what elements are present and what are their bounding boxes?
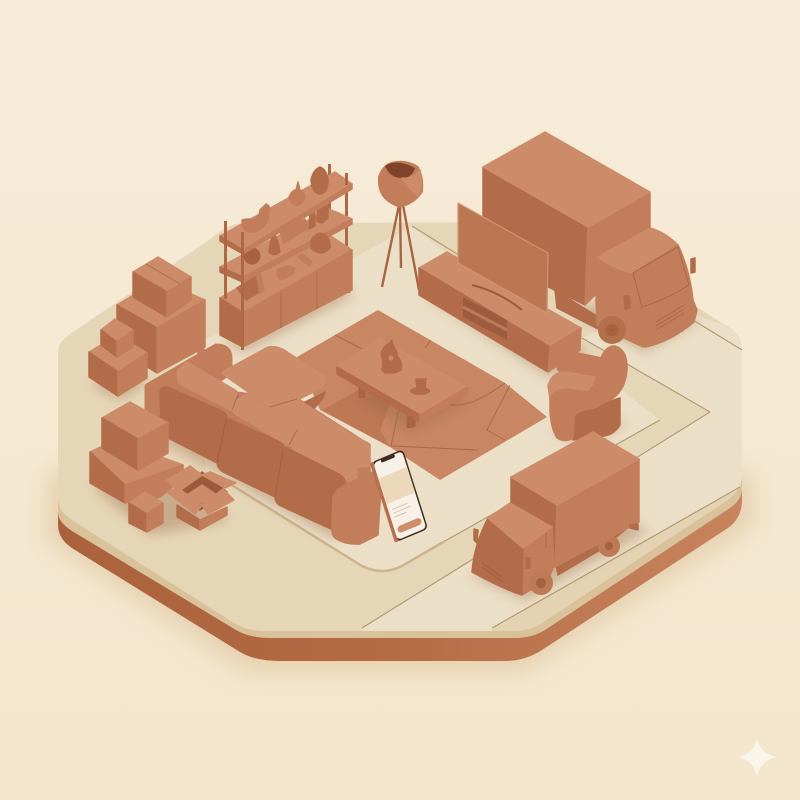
platform shadow xyxy=(44,470,756,672)
platform light lip xyxy=(58,400,742,638)
inner carton xyxy=(187,485,217,503)
large moving truck xyxy=(483,132,697,347)
large box xyxy=(117,280,205,328)
platform terracotta side band xyxy=(58,400,742,661)
lamp shade xyxy=(379,162,422,207)
sofa backing fill xyxy=(162,368,370,486)
floor lamp xyxy=(379,162,422,290)
road and room lines xyxy=(362,226,742,628)
screen button xyxy=(397,517,422,534)
lower wide box xyxy=(90,440,183,485)
back and right arm xyxy=(550,346,627,440)
TV stand xyxy=(419,252,581,372)
smartphone xyxy=(370,449,428,543)
front box group xyxy=(90,402,183,532)
tv screen xyxy=(458,203,548,313)
platform top face xyxy=(58,222,742,631)
sofa end arm xyxy=(332,470,382,544)
phone body xyxy=(371,449,428,542)
cargo left face xyxy=(511,477,557,567)
seat cushion two xyxy=(272,401,345,440)
armchair xyxy=(548,346,627,440)
back cushion three xyxy=(294,429,355,483)
box inside xyxy=(177,472,227,510)
cargo box top xyxy=(483,132,650,227)
cargo box right face xyxy=(585,192,650,305)
legs xyxy=(362,385,448,428)
front wheel xyxy=(529,571,553,595)
chaise seat xyxy=(224,348,322,405)
sofa xyxy=(147,346,382,544)
module separators xyxy=(217,420,283,497)
seat xyxy=(548,372,612,412)
undercarriage xyxy=(555,530,625,575)
grille xyxy=(656,305,684,330)
back cushion one xyxy=(179,364,235,409)
middle shelf vases and book stack xyxy=(244,203,330,264)
small delivery truck xyxy=(472,432,639,595)
room floor mat xyxy=(205,226,660,571)
upper box xyxy=(102,402,168,439)
middle shelf xyxy=(220,209,352,277)
cabinet top xyxy=(220,235,352,313)
television xyxy=(458,203,548,313)
mat front edge xyxy=(230,484,445,571)
cushion seams xyxy=(232,395,297,445)
cargo right face xyxy=(555,459,639,567)
table top xyxy=(337,338,467,415)
tv base xyxy=(472,285,522,310)
chair base xyxy=(573,398,620,440)
front posts xyxy=(224,164,348,350)
lower shelf items xyxy=(277,254,312,280)
object shadows xyxy=(90,285,700,600)
rear wheel xyxy=(598,535,620,557)
rear posts xyxy=(328,164,350,293)
phone notch xyxy=(380,454,395,463)
rug seams xyxy=(335,335,510,450)
lamp opening xyxy=(385,162,415,178)
phone screen xyxy=(373,451,426,540)
open box xyxy=(167,466,236,530)
back left arm xyxy=(147,346,230,420)
mirror xyxy=(474,529,530,568)
chassis and under carriage xyxy=(555,290,600,330)
wheel xyxy=(598,316,626,344)
rear bumper xyxy=(630,524,638,530)
mirrors xyxy=(624,258,695,309)
cab side xyxy=(596,257,643,347)
box stack back xyxy=(117,257,205,373)
rug xyxy=(297,310,547,480)
octagonal platform xyxy=(58,222,742,661)
cargo top xyxy=(511,432,639,505)
front module one xyxy=(160,387,226,463)
cabinet left side xyxy=(220,298,243,347)
cabinet doors xyxy=(243,250,352,347)
coffee table xyxy=(337,338,467,428)
cab front xyxy=(472,518,523,595)
rear arm xyxy=(557,352,602,378)
box body xyxy=(177,505,200,530)
pillow xyxy=(198,346,220,378)
lamp facets xyxy=(402,170,421,196)
cab front xyxy=(633,245,697,347)
sculpture xyxy=(381,340,402,373)
cab roof xyxy=(488,503,552,548)
rug shaded inlay under table xyxy=(322,388,390,447)
cup and saucer xyxy=(410,379,430,395)
top shelf xyxy=(220,172,352,250)
upper box xyxy=(133,257,191,292)
top shelf vases xyxy=(242,167,328,232)
box flaps xyxy=(167,466,202,492)
outer road strip xyxy=(492,476,742,631)
screen panel xyxy=(379,467,415,504)
small cube xyxy=(129,492,163,514)
grille and window lines xyxy=(482,533,546,582)
cab side xyxy=(522,527,554,595)
front module two xyxy=(217,417,283,497)
cargo box left face xyxy=(483,167,588,305)
windshield line xyxy=(633,247,689,307)
lamp legs xyxy=(382,205,419,290)
road surface xyxy=(362,300,742,631)
shelving unit xyxy=(220,164,352,350)
books xyxy=(237,272,264,300)
icon: sparkle watermark xyxy=(737,738,777,777)
seat cushion three xyxy=(332,434,368,465)
screen lines xyxy=(392,502,412,517)
back cushion two xyxy=(235,395,295,444)
small top box xyxy=(101,319,133,342)
chaise side xyxy=(303,392,325,410)
front module three xyxy=(275,447,345,530)
stand opening xyxy=(463,297,507,340)
cab roof xyxy=(598,228,678,273)
box stack left xyxy=(89,319,147,396)
